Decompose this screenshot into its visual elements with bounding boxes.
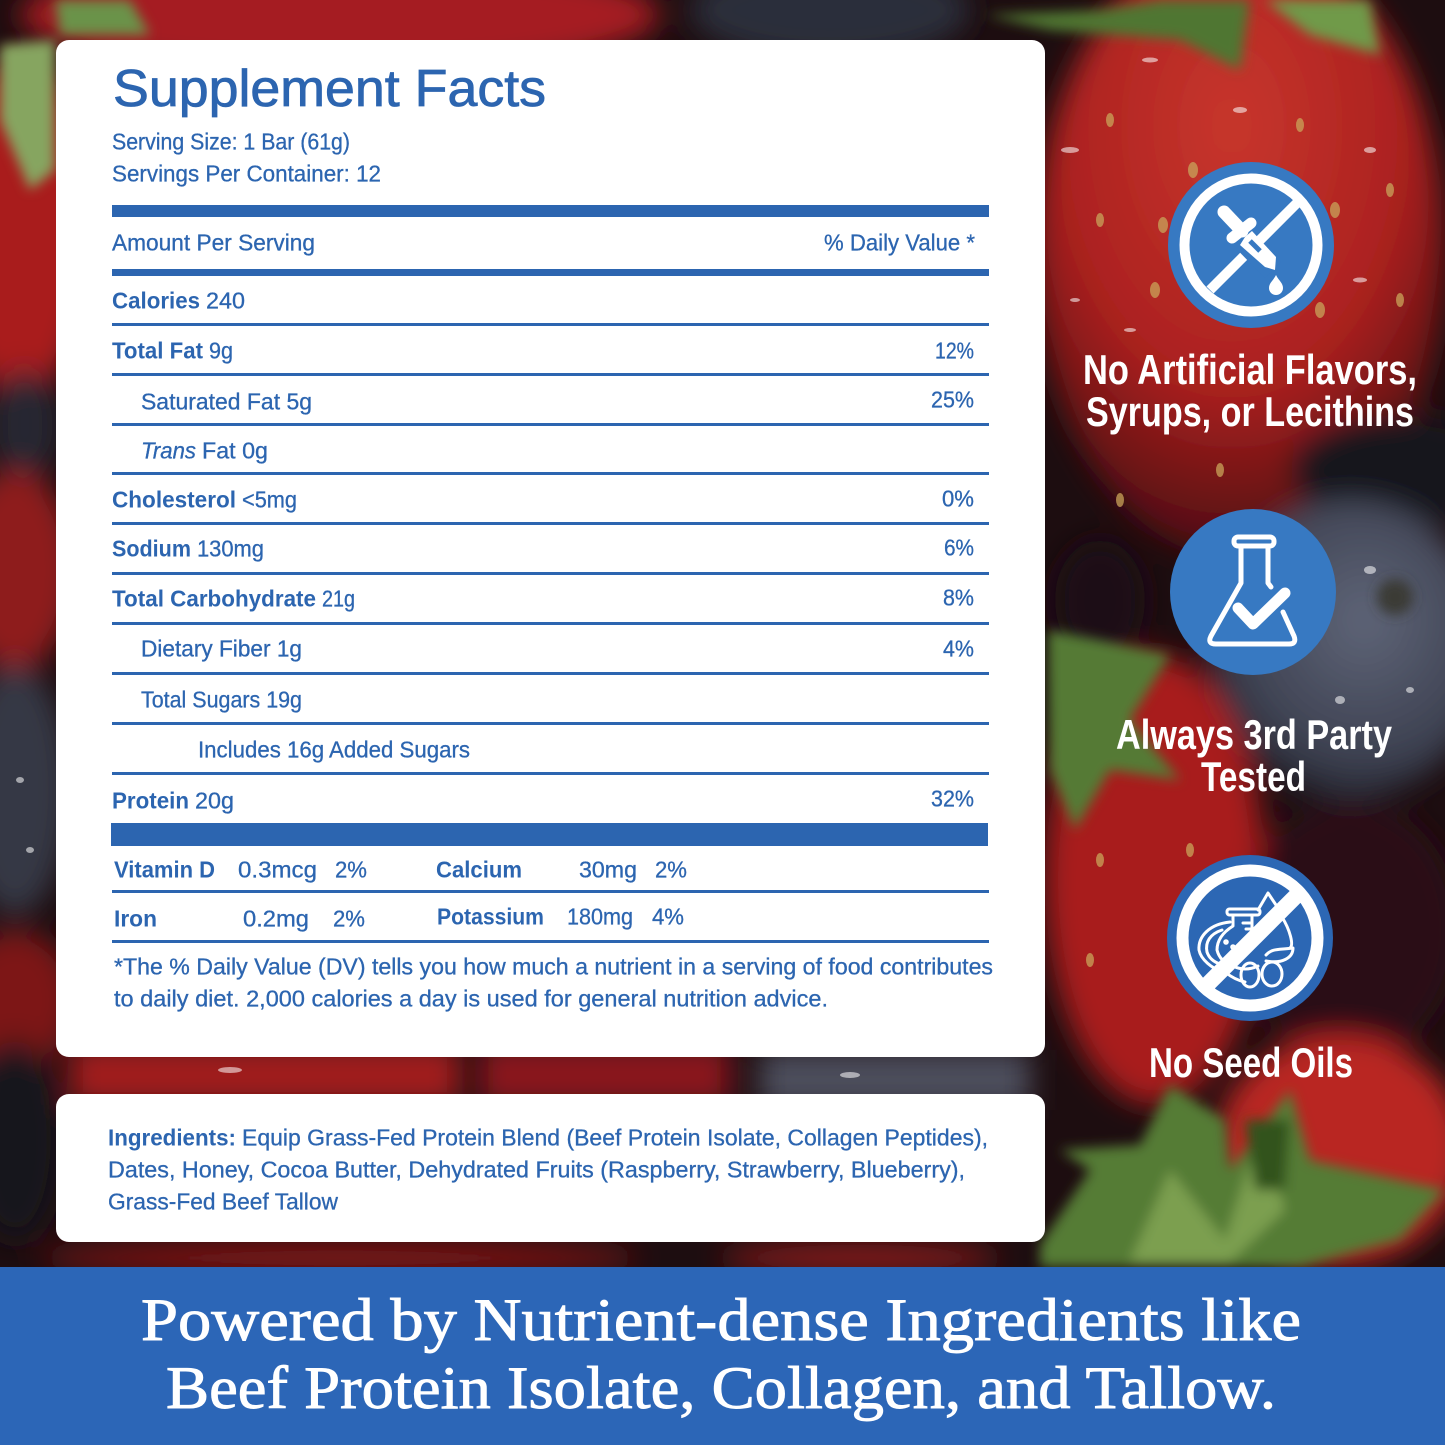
row: total fat xyxy=(112,337,974,363)
row: total fat: 9g xyxy=(209,337,233,363)
row: protein: Protein xyxy=(112,787,189,813)
panel: ingredients xyxy=(56,1094,1045,1242)
row: calories xyxy=(112,287,245,313)
row: dietary fiber: Dietary Fiber 1g xyxy=(141,635,302,661)
row: trans fat: Trans xyxy=(141,437,196,463)
row: protein xyxy=(112,785,974,813)
vitamin d and calcium: 2% xyxy=(335,856,367,882)
ingredients text xyxy=(108,1124,988,1214)
row: cholesterol: 0% xyxy=(942,485,974,511)
vitamin d and calcium: 0.3mcg xyxy=(238,856,317,882)
iron and potassium: 180mg xyxy=(567,903,633,929)
serving information: Servings Per Container: 12 xyxy=(112,160,381,186)
row: calories: Calories xyxy=(112,287,200,313)
row: protein: 20g xyxy=(195,787,234,813)
title: Supplement Facts xyxy=(113,60,546,118)
vitamin d and calcium: Calcium xyxy=(436,856,522,882)
row: saturated fat: Saturated Fat 5g xyxy=(141,388,312,414)
row: cholesterol: Cholesterol xyxy=(112,486,236,512)
iron and potassium: 4% xyxy=(652,903,684,929)
iron and potassium: Iron xyxy=(114,905,157,931)
row: total carbohydrate: Total Carbohydrate xyxy=(112,585,316,611)
row: calories: 240 xyxy=(206,287,245,313)
daily value footnote: to daily diet. 2,000 calories a day is used for general nutrition advice. xyxy=(114,985,828,1011)
panel: supplement facts xyxy=(56,40,1045,1057)
banner: powered by nutrient-dense ingredients xyxy=(0,1267,1445,1445)
label: no artificial flavors xyxy=(1083,346,1417,435)
ingredients text: Dates, Honey, Cocoa Butter, Dehydrated Fruits (Raspberry, Strawberry, Blueberry), xyxy=(108,1156,965,1182)
row: total carbohydrate xyxy=(112,584,974,611)
label: third party tested xyxy=(1116,711,1393,800)
serving information xyxy=(112,128,381,186)
row: dietary fiber: 4% xyxy=(943,635,974,661)
row: sodium: 6% xyxy=(944,534,974,560)
iron and potassium: 0.2mg xyxy=(243,905,309,931)
iron and potassium: 2% xyxy=(333,905,365,931)
header rules and labels: % Daily Value * xyxy=(824,229,975,255)
serving information: Serving Size: 1 Bar (61g) xyxy=(112,128,350,154)
iron and potassium xyxy=(114,903,684,931)
row: cholesterol: <5mg xyxy=(242,486,297,512)
label: third party tested: Always 3rd Party xyxy=(1116,711,1393,758)
row: trans fat xyxy=(141,437,268,463)
header rules and labels: Amount Per Serving xyxy=(112,229,315,255)
vitamin d and calcium: 30mg xyxy=(579,856,637,882)
ingredients text: Equip Grass-Fed Protein Blend (Beef Protein Isolate, Collagen Peptides), xyxy=(242,1124,988,1150)
row: sodium xyxy=(112,534,974,561)
row: total fat: 12% xyxy=(935,337,974,363)
daily value footnote: *The % Daily Value (DV) tells you how much a nutrient in a serving of food contributes xyxy=(114,953,993,979)
row: total carbohydrate: 21g xyxy=(322,585,355,611)
iron and potassium: Potassium xyxy=(437,903,544,929)
icon: third party tested flask xyxy=(1170,509,1336,675)
banner text: Powered by Nutrient-dense Ingredients like xyxy=(141,1287,1301,1353)
daily value footnote xyxy=(114,953,993,1011)
icon: no seed oils xyxy=(1167,855,1333,1021)
row: cholesterol xyxy=(112,485,974,512)
header rules and labels xyxy=(112,205,989,276)
vitamin d and calcium xyxy=(114,856,687,882)
row: total carbohydrate: 8% xyxy=(943,584,974,610)
ingredients text: Ingredients: xyxy=(108,1124,236,1150)
nutrition table rows xyxy=(112,287,989,813)
row: trans fat: Fat 0g xyxy=(202,437,268,463)
banner text: Beef Protein Isolate, Collagen, and Tallow. xyxy=(166,1355,1276,1421)
label: third party tested: Tested xyxy=(1201,753,1306,800)
vitamins and minerals xyxy=(112,856,989,943)
thick divider bar xyxy=(111,823,988,846)
row: sodium: Sodium xyxy=(112,535,191,561)
ingredients text: Grass-Fed Beef Tallow xyxy=(108,1188,338,1214)
vitamin d and calcium: Vitamin D xyxy=(114,856,215,882)
row: total fat: Total Fat xyxy=(112,337,203,363)
icon: no artificial flavors dropper xyxy=(1168,162,1334,328)
row: saturated fat: 25% xyxy=(931,386,974,412)
banner text xyxy=(141,1287,1301,1421)
row: saturated fat xyxy=(141,386,974,414)
row: sodium: 130mg xyxy=(197,535,264,561)
row: protein: 32% xyxy=(931,785,974,811)
label: no seed oils: No Seed Oils xyxy=(1149,1039,1353,1086)
row: added sugars: Includes 16g Added Sugars xyxy=(198,736,470,762)
row: dietary fiber xyxy=(141,635,974,661)
vitamin d and calcium: 2% xyxy=(655,856,687,882)
row: total sugars: Total Sugars 19g xyxy=(141,686,302,712)
